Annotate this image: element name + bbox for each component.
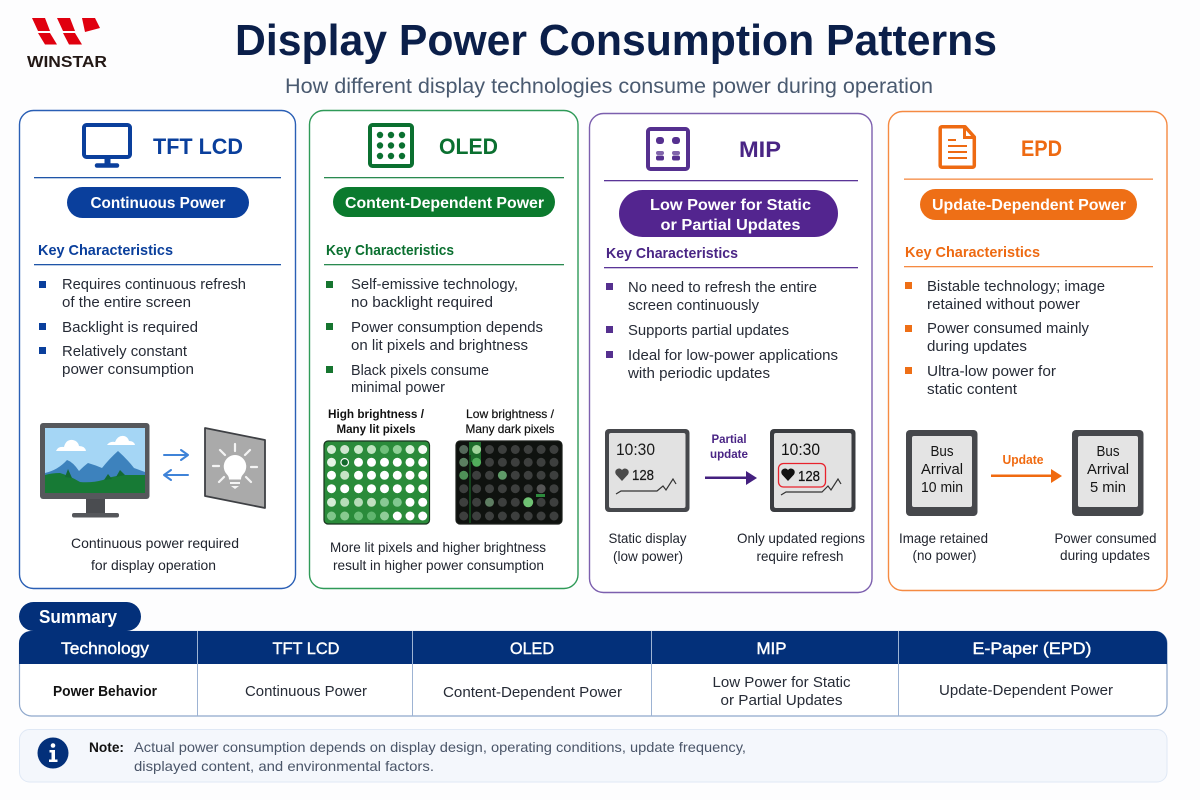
caption: TFT: Continuous power required xyxy=(71,535,239,551)
note text xyxy=(89,739,746,774)
caption: image retained: (no power) xyxy=(912,547,976,563)
caption: TFT xyxy=(71,535,239,573)
caption: static display: Static display xyxy=(608,530,686,546)
heading: OLED: OLED xyxy=(439,134,498,159)
arrow: partial update xyxy=(705,432,757,485)
list: OLED characteristics: Black pixels consume xyxy=(351,362,489,379)
caption: power consumed xyxy=(1054,530,1156,563)
caption: OLED xyxy=(330,539,546,573)
list: TFT characteristics: Backlight is required xyxy=(62,319,198,336)
list: OLED characteristics: no backlight required xyxy=(351,294,493,311)
caption: OLED: result in higher power consumption xyxy=(333,557,544,573)
caption: image retained: Image retained xyxy=(899,530,988,546)
table header: Technology xyxy=(61,640,150,658)
highlight: updated region: 128 xyxy=(798,468,820,485)
device: bus arrival 10 min: Bus xyxy=(930,443,954,460)
panel: MIP xyxy=(590,114,872,592)
table header xyxy=(61,640,1092,658)
badge: content-dependent power xyxy=(333,187,555,217)
table header: E-Paper (EPD) xyxy=(972,640,1092,658)
list: MIP characteristics: No need to refresh the entire xyxy=(628,279,817,296)
caption: OLED: More lit pixels and higher brightness xyxy=(330,539,546,555)
arrow: update: Update xyxy=(1002,452,1044,467)
list: TFT characteristics: Relatively constant xyxy=(62,343,188,360)
list: EPD characteristics xyxy=(905,278,1105,398)
table row: power behavior: Content-Dependent Power xyxy=(443,685,622,701)
list: OLED characteristics: minimal power xyxy=(351,379,445,396)
heading: EPD: EPD xyxy=(1021,136,1062,161)
badge: low power: or Partial Updates xyxy=(660,217,801,234)
icon: document xyxy=(940,127,974,167)
list: OLED characteristics: on lit pixels and brightness xyxy=(351,337,528,354)
badge: update-dependent power: Update-Dependent Power xyxy=(932,197,1126,214)
label: low brightness xyxy=(466,407,555,436)
list: MIP characteristics: Ideal for low-power applications xyxy=(628,347,838,364)
panel: TFT LCD xyxy=(20,110,296,588)
table row: power behavior: Update-Dependent Power xyxy=(939,683,1113,699)
table header: OLED xyxy=(510,640,554,658)
heading: TFT LCD: TFT LCD xyxy=(153,134,243,159)
table row: power behavior: Power Behavior xyxy=(53,684,157,700)
list: EPD characteristics: Power consumed mainly xyxy=(927,320,1089,337)
badge: continuous power xyxy=(67,187,249,218)
note text: Note: xyxy=(89,739,124,755)
list: EPD characteristics: static content xyxy=(927,381,1018,398)
label: high brightness xyxy=(328,407,425,436)
badge: continuous power: Continuous Power xyxy=(90,195,226,212)
icon: info xyxy=(38,738,68,768)
device: bus arrival 5 min xyxy=(1072,430,1144,516)
heading: MIP: MIP xyxy=(739,137,781,162)
arrow: update xyxy=(991,452,1062,483)
device: bus arrival 5 min: Arrival xyxy=(1087,461,1129,478)
list: MIP characteristics xyxy=(606,279,838,382)
list: EPD characteristics: Bistable technology; image xyxy=(927,278,1105,295)
summary table xyxy=(19,631,1167,716)
device: bus arrival 10 min xyxy=(906,430,978,516)
heading: key characteristics: Key Characteristics xyxy=(38,242,173,259)
arrow: partial update: update xyxy=(710,447,748,461)
arrow: partial update: Partial xyxy=(712,432,746,446)
illustration: backlight panel with bulb xyxy=(205,428,265,508)
list: OLED characteristics xyxy=(326,276,543,396)
note text: displayed content, and environmental factors. xyxy=(134,758,434,774)
list: MIP characteristics: with periodic updates xyxy=(627,365,770,382)
caption: updated regions: Only updated regions xyxy=(737,530,865,546)
heading: key characteristics: Key Characteristics xyxy=(326,242,454,259)
caption: static display xyxy=(608,530,686,564)
badge: low power xyxy=(619,190,838,237)
table row: power behavior xyxy=(53,675,1113,709)
logo: Winstar xyxy=(27,18,107,71)
label: low brightness: Low brightness / xyxy=(466,407,555,421)
label: high brightness: High brightness / xyxy=(328,407,425,421)
device: bus arrival 10 min: 10 min xyxy=(921,479,963,496)
pixel grid: high brightness xyxy=(324,441,430,524)
list: TFT characteristics: of the entire screen xyxy=(62,294,191,311)
badge: content-dependent power: Content-Dependent Power xyxy=(345,195,544,212)
caption: updated regions xyxy=(737,530,865,564)
device: static display xyxy=(605,429,690,512)
device: partial refresh xyxy=(770,429,856,512)
list: MIP characteristics: screen continuously xyxy=(628,297,759,314)
caption: TFT: for display operation xyxy=(91,557,216,573)
device: static display: 128 xyxy=(632,467,654,484)
list: TFT characteristics: power consumption xyxy=(62,361,194,378)
summary tab: Summary xyxy=(39,607,117,627)
label: high brightness: Many lit pixels xyxy=(336,422,416,436)
list: EPD characteristics: during updates xyxy=(927,338,1027,355)
list: OLED characteristics: Power consumption depends xyxy=(351,319,543,336)
table row: power behavior: Low Power for Static xyxy=(712,675,850,691)
table header: TFT LCD xyxy=(272,640,340,658)
badge: update-dependent power xyxy=(920,189,1137,220)
pixel grid: low brightness xyxy=(456,441,562,524)
caption: static display: (low power) xyxy=(613,548,683,564)
label: low brightness: Many dark pixels xyxy=(466,422,554,436)
list: OLED characteristics: Self-emissive technology, xyxy=(351,276,518,293)
illustration: monitor with landscape xyxy=(40,423,150,518)
heading: key characteristics: Key Characteristics xyxy=(905,244,1040,261)
list: TFT characteristics xyxy=(39,276,246,378)
title: Display Power Consumption Patterns xyxy=(235,16,997,65)
caption: image retained xyxy=(899,530,988,563)
table row: power behavior: Continuous Power xyxy=(245,684,367,700)
note box xyxy=(20,730,1167,782)
subtitle: How different display technologies consume power during operation xyxy=(285,75,933,98)
icon: monitor xyxy=(84,125,130,166)
caption: power consumed: during updates xyxy=(1060,547,1150,563)
caption: updated regions: require refresh xyxy=(756,548,844,564)
icon: MIP pixels xyxy=(648,129,688,169)
badge: low power: Low Power for Static xyxy=(650,197,811,214)
device: bus arrival 5 min: 5 min xyxy=(1090,479,1126,496)
note text: Actual power consumption depends on display design, operating conditions, update frequency, xyxy=(134,739,746,755)
device: bus arrival 5 min: Bus xyxy=(1096,443,1120,460)
list: TFT characteristics: Requires continuous refresh xyxy=(62,276,246,293)
icon: pixel grid xyxy=(370,125,412,166)
caption: power consumed: Power consumed xyxy=(1054,530,1156,546)
arrows: power exchange xyxy=(164,450,188,480)
list: EPD characteristics: retained without power xyxy=(927,296,1080,313)
panel: EPD xyxy=(888,112,1167,590)
table header: MIP xyxy=(756,640,786,658)
device: partial refresh: 10:30 xyxy=(781,440,820,459)
list: MIP characteristics: Supports partial updates xyxy=(628,322,789,339)
table row: power behavior: or Partial Updates xyxy=(720,693,842,709)
device: static display: 10:30 xyxy=(616,440,655,459)
panel: OLED xyxy=(310,110,578,588)
summary tab xyxy=(19,602,141,631)
heading: key characteristics: Key Characteristics xyxy=(606,245,738,262)
device: bus arrival 10 min: Arrival xyxy=(921,461,963,478)
logo: Winstar: WINSTAR xyxy=(27,54,107,71)
list: EPD characteristics: Ultra-low power for xyxy=(927,363,1056,380)
